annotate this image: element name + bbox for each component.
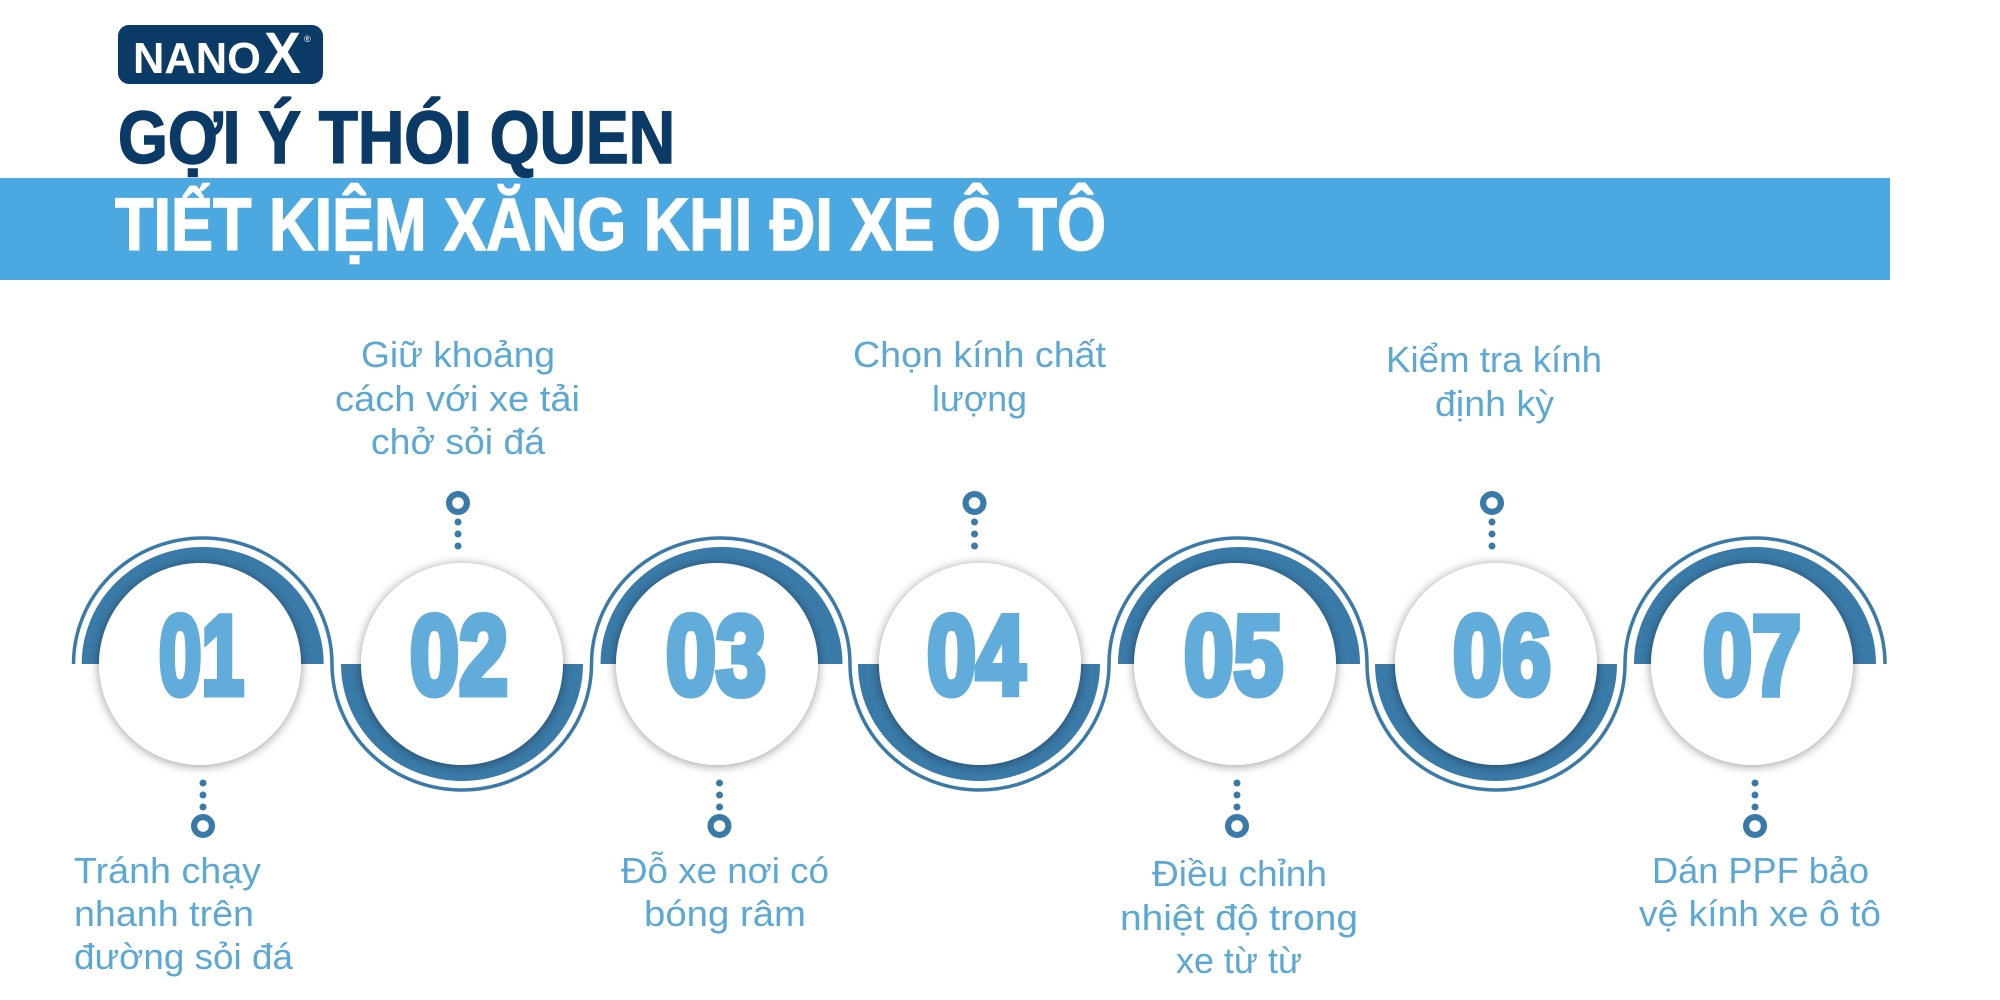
step 03 text — [621, 850, 829, 934]
step 07 number: 07 — [1703, 593, 1801, 718]
step 07 text — [1639, 850, 1881, 934]
step 02 circle — [361, 563, 563, 765]
step 05 text — [1120, 853, 1358, 981]
title banner — [0, 178, 1890, 280]
step 03 number: 03 — [666, 593, 766, 718]
step 05 text: Điều chỉnh — [1152, 853, 1327, 894]
step 01 number: 01 — [159, 593, 244, 718]
step 01 connector — [194, 780, 212, 835]
step 06 text: Kiểm tra kính — [1386, 339, 1602, 380]
step 01 circle — [99, 563, 301, 765]
step 03 text: bóng râm — [644, 893, 806, 934]
step 03 text: Đỗ xe nơi có — [621, 850, 829, 891]
step 05 number: 05 — [1184, 593, 1283, 718]
step 01 text: đường sỏi đá — [74, 936, 294, 977]
logo: NanoX: NANO — [133, 34, 261, 83]
step 04 text: Chọn kính chất — [853, 334, 1106, 375]
step 04 circle — [879, 563, 1081, 765]
step 06 — [1386, 339, 1602, 765]
logo: NanoX: X — [264, 21, 301, 86]
step 06 connector — [1483, 494, 1501, 550]
step 02 text — [335, 334, 580, 462]
step 07 circle — [1651, 563, 1853, 765]
step 06 text: định kỳ — [1435, 383, 1554, 424]
timeline wave — [74, 538, 1885, 790]
title line 1: GỢI Ý THÓI QUEN — [118, 96, 675, 179]
step 01 text — [74, 850, 294, 977]
logo: NanoX — [118, 21, 323, 86]
step 05 connector — [1228, 780, 1246, 835]
step 04 — [853, 334, 1106, 765]
step 07 — [1639, 563, 1881, 934]
title banner: TIẾT KIỆM XĂNG KHI ĐI XE Ô TÔ — [115, 183, 1106, 266]
step 04 number: 04 — [927, 593, 1025, 718]
step 02 text: chở sỏi đá — [371, 421, 546, 462]
step 07 text: vệ kính xe ô tô — [1639, 893, 1881, 934]
step 07 text: Dán PPF bảo — [1652, 850, 1869, 891]
step 04 connector — [966, 494, 983, 550]
step 06 circle — [1395, 563, 1597, 765]
step 02 text: Giữ khoảng — [361, 334, 555, 375]
step 02 text: cách với xe tải — [335, 378, 580, 419]
step 01 text: Tránh chạy — [74, 850, 261, 891]
step 02 — [335, 334, 580, 765]
step 02 connector — [449, 494, 467, 550]
step 07 connector — [1746, 780, 1764, 835]
step 01 — [74, 563, 301, 977]
logo: NanoX: ® — [304, 34, 311, 44]
step 06 text — [1386, 339, 1602, 424]
step 03 circle — [616, 563, 818, 765]
step 06 number: 06 — [1453, 593, 1551, 718]
step 01 text: nhanh trên — [74, 893, 254, 934]
step 05 text: nhiệt độ trong — [1120, 897, 1358, 938]
step 05 text: xe từ từ — [1176, 940, 1302, 981]
step 03 connector — [711, 780, 728, 835]
step 05 circle — [1134, 563, 1336, 765]
step 04 text — [853, 334, 1106, 419]
step 05 — [1120, 563, 1358, 981]
step 04 text: lượng — [932, 378, 1027, 419]
step 03 — [616, 563, 829, 934]
step 02 number: 02 — [410, 593, 508, 718]
